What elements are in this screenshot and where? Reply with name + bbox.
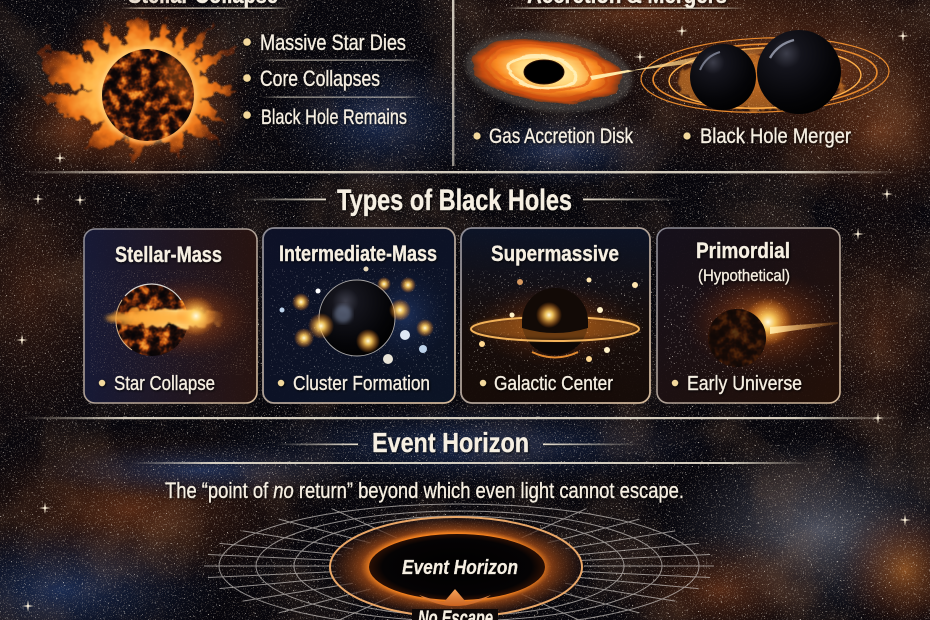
label: primordial: Primordial bbox=[696, 238, 790, 263]
label: black hole merger: Black Hole Merger bbox=[700, 125, 851, 148]
list: stellar collapse stages bbox=[243, 30, 422, 129]
spacetime grid bbox=[204, 504, 714, 620]
card: supermassive bbox=[461, 228, 650, 403]
illustration: black hole merger bbox=[630, 30, 890, 119]
diagram: event horizon spacetime grid bbox=[204, 504, 714, 620]
no escape label backing bbox=[412, 609, 498, 620]
section divider lines bbox=[20, 0, 902, 464]
arrow: no escape marker bbox=[419, 589, 491, 606]
label: cluster formation: Cluster Formation bbox=[293, 373, 430, 395]
panel: stellar collapse bbox=[40, 0, 422, 197]
illustration: gas accretion disk bbox=[461, 23, 637, 121]
illustration: star collapse bbox=[103, 276, 255, 360]
label: galactic center: Galactic Center bbox=[494, 373, 613, 395]
illustration: exploding star bbox=[40, 0, 251, 197]
list: stellar collapse stages: Black Hole Remains bbox=[261, 106, 407, 129]
card: stellar-mass bbox=[84, 229, 257, 403]
event horizon ring bbox=[330, 517, 582, 617]
heading: event horizon: Event Horizon bbox=[372, 427, 529, 458]
label: early universe: Early Universe bbox=[687, 373, 802, 395]
label: intermediate-mass: Intermediate-Mass bbox=[279, 241, 437, 266]
card: primordial bbox=[657, 228, 840, 403]
illustration: early universe bbox=[684, 270, 840, 374]
text: event horizon definition: The “point of no return” beyond which even light cannot escape. bbox=[165, 478, 684, 503]
label: hypothetical: (Hypothetical) bbox=[698, 266, 790, 285]
label: star collapse: Star Collapse bbox=[114, 373, 215, 395]
card: intermediate-mass bbox=[263, 228, 455, 403]
label: stellar-mass: Stellar-Mass bbox=[115, 242, 222, 267]
label: supermassive: Supermassive bbox=[491, 241, 619, 266]
list: stellar collapse stages: Massive Star Dies bbox=[260, 30, 406, 55]
panel: accretion and mergers bbox=[461, 0, 890, 148]
illustration: galactic center bbox=[470, 278, 640, 367]
illustration: star cluster bbox=[280, 265, 450, 365]
label: gas accretion disk: Gas Accretion Disk bbox=[489, 125, 633, 148]
label: event horizon inside hole: Event Horizon bbox=[402, 557, 518, 579]
list: stellar collapse stages: Core Collapses bbox=[260, 66, 380, 91]
heading: types of black holes: Types of Black Holes bbox=[337, 184, 572, 217]
